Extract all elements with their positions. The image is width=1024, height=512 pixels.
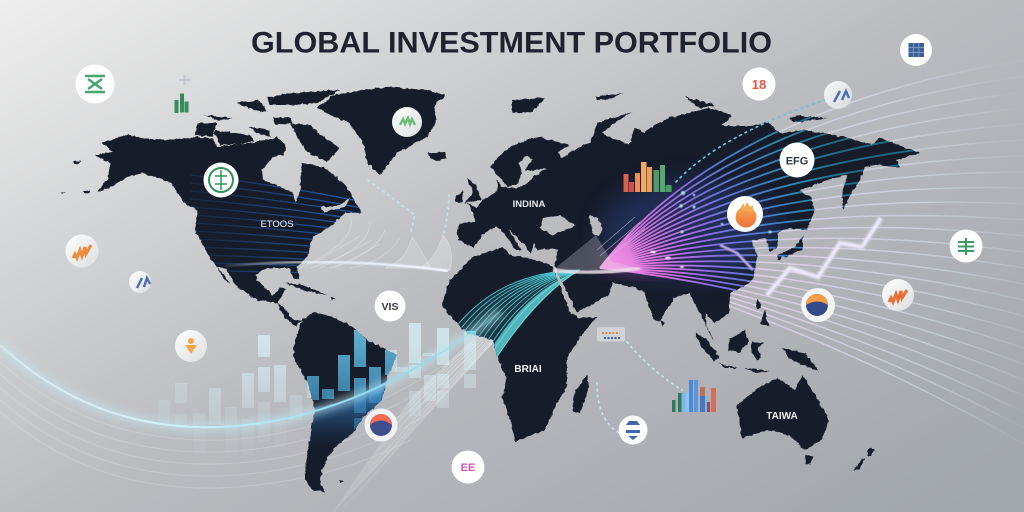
icon: pink glyph badge: EE <box>461 462 475 474</box>
icon: VIS badge <box>374 290 406 322</box>
icon: green pattern badge <box>76 64 114 104</box>
icon: blue slash badge left <box>129 271 151 293</box>
pale fan towards the South Atlantic <box>333 268 560 512</box>
map label: ETOOS: ETOOS <box>260 219 294 230</box>
title: GLOBAL INVESTMENT PORTFOLIO <box>251 26 772 60</box>
icon: orange and navy orb <box>801 288 835 322</box>
pale mesh over the Middle East <box>553 217 645 275</box>
swoosh wedge over South America <box>310 382 386 445</box>
streak across the North Atlantic <box>225 262 448 271</box>
icon: EFG badge <box>780 142 814 178</box>
light specks on the Asian rays <box>650 191 772 268</box>
teal fan over Africa <box>445 270 580 357</box>
rays across North America <box>190 174 360 274</box>
icon: Greenland waveform badge <box>392 107 422 137</box>
bars: pale over ocean <box>158 323 476 455</box>
icon: orange trend badge left <box>66 234 98 268</box>
pale ray fan over the ocean <box>612 60 1024 444</box>
icon: green ring badge <box>204 162 238 198</box>
world map land masses <box>60 87 920 492</box>
bar chart: Russia <box>624 162 672 192</box>
icon: flame badge <box>727 196 763 232</box>
dotted connector lines <box>368 100 825 433</box>
icon: solar grid badge <box>900 34 932 66</box>
icon: green mini bars with plus <box>174 75 190 113</box>
pale fan near North Atlantic <box>300 215 451 270</box>
icon: 18 badge: 18 <box>752 77 766 92</box>
bars: blue over South America <box>307 330 476 445</box>
glow over Asia <box>600 180 780 280</box>
icon: small data panel <box>597 327 625 342</box>
swoosh across the South Atlantic <box>0 312 500 427</box>
icon: 18 badge <box>742 68 776 100</box>
icon: blue slash badge right <box>824 81 852 109</box>
icon: red and navy orb <box>364 408 398 442</box>
map label: BRIAI: BRIAI <box>514 364 542 375</box>
map label: INDINA: INDINA <box>513 199 545 210</box>
rising arrow line <box>720 218 881 295</box>
icon: orange trend badge right <box>882 279 914 311</box>
icon: green bars badge <box>950 230 982 262</box>
map label: TAIWA: TAIWA <box>766 411 798 422</box>
icon: VIS badge: VIS <box>382 301 398 313</box>
bar chart: Indian Ocean <box>672 380 716 412</box>
icon: EFG badge: EFG <box>786 156 808 168</box>
swoosh parallel faint lines <box>0 332 490 488</box>
icon: orange person badge <box>175 330 207 362</box>
icon: blue gear badge <box>618 416 648 444</box>
rays across Asia <box>599 116 915 291</box>
icon: pink glyph badge <box>452 450 484 484</box>
